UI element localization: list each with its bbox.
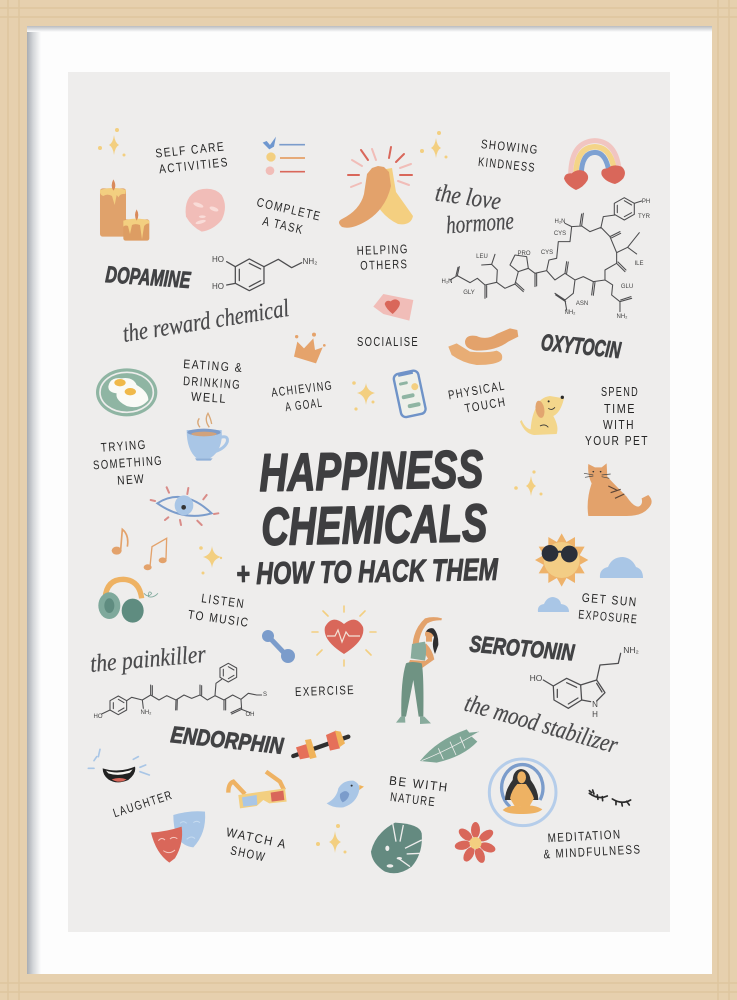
script: the love hormone: the love [434, 180, 503, 215]
label: watch a show [221, 825, 288, 868]
chart: oxytocin molecule: TYR [638, 214, 651, 220]
icon: crown [294, 333, 326, 363]
label: eating and drinking well [181, 357, 244, 407]
icon: gold sparkle right of title [514, 470, 542, 496]
chart: dopamine molecule: HO [212, 282, 224, 291]
chart: oxytocin molecule: LEU [476, 254, 488, 260]
label: showing kindness: KINDNESS [477, 155, 537, 175]
label: helping others: HELPING [357, 242, 409, 258]
label: self care activities: SELF CARE [155, 139, 226, 161]
script: the love hormone: hormone [445, 208, 515, 239]
label: trying something new [91, 437, 165, 489]
icon: monstera leaf [371, 823, 422, 873]
poster paper [68, 72, 670, 932]
label: achieving a goal: ACHIEVING [271, 378, 334, 400]
chart: endorphin molecule: HO [94, 714, 103, 720]
script: the love hormone [434, 180, 515, 239]
label: listen to music: LISTEN [200, 591, 246, 611]
label: complete a task [251, 195, 323, 240]
icon: high five [339, 147, 413, 228]
chart: serotonin molecule: H [592, 710, 598, 719]
label: meditation and mindfulness: & MINDFULNESS [543, 842, 642, 861]
icon: gold sparkle top centre [420, 131, 448, 158]
icon: small cloud [538, 597, 569, 612]
chart: serotonin molecule: N [592, 700, 598, 709]
label: physical touch [447, 379, 509, 418]
icon: blue dumbbell [262, 630, 295, 663]
chart: oxytocin molecule: PRO [517, 251, 531, 257]
chart: oxytocin molecule: PH [642, 199, 650, 205]
label: self care activities [155, 139, 229, 177]
icon: music notes [112, 529, 167, 570]
chart: endorphin molecule: S [263, 692, 267, 698]
icon: eggs on plate [96, 368, 157, 416]
label: get sun exposure [578, 590, 640, 627]
chart: oxytocin molecule: CYS [541, 250, 553, 256]
label: meditation and mindfulness: MEDITATION [547, 827, 622, 845]
label: helping others [357, 242, 410, 273]
label: self care activities: ACTIVITIES [158, 155, 229, 176]
icon: speech bubble heart [373, 294, 413, 321]
label: get sun exposure: GET SUN [581, 591, 638, 609]
chart: oxytocin molecule: CYS [554, 231, 566, 237]
label: spend time with your pet: YOUR PET [585, 434, 649, 448]
label: be with nature [386, 774, 450, 811]
chart: dopamine molecule: HO [212, 255, 224, 264]
label: exercise: EXERCISE [295, 683, 355, 699]
label: spend time with your pet: SPEND [601, 385, 639, 399]
label: showing kindness: SHOWING [480, 137, 539, 157]
label: physical touch: PHYSICAL [447, 379, 507, 402]
icon: gold sparkle top left [98, 128, 126, 156]
chart: oxytocin molecule: ILE [634, 261, 644, 267]
icon: phone [393, 370, 426, 418]
icon: rainbow with hearts [564, 141, 625, 190]
label: laughter: LAUGHTER [111, 788, 175, 820]
chart: oxytocin molecule: ASN [576, 301, 588, 307]
label: meditation and mindfulness [542, 826, 642, 861]
chart: oxytocin molecule: NH₂ [616, 314, 628, 320]
script: the reward chemical: the reward chemical [121, 295, 291, 348]
title: CHEMICALS [261, 494, 488, 557]
icon: large cloud [600, 557, 643, 578]
label: spend time with your pet [585, 385, 649, 448]
label: trying something new: SOMETHING [93, 454, 163, 472]
label: eating and drinking well: DRINKING [183, 374, 241, 392]
label: trying something new: TRYING [100, 438, 147, 455]
icon: candles [100, 179, 149, 241]
icon: eye [151, 487, 218, 525]
icon: coffee cup [187, 413, 227, 461]
label: complete a task: A TASK [261, 214, 305, 237]
label: listen to music: TO MUSIC [187, 608, 250, 630]
heading: oxytocin: OXYTOCIN [540, 329, 622, 363]
label: complete a task: COMPLETE [255, 195, 323, 224]
label: be with nature: NATURE [389, 790, 437, 809]
title: + HOW TO HACK THEM [236, 552, 499, 591]
icon: heart with rays [312, 606, 376, 666]
icon: bird [327, 781, 364, 807]
icon: face mask [186, 189, 225, 232]
heading: dopamine: DOPAMINE [105, 261, 192, 293]
chart: serotonin molecule: HO [530, 673, 543, 683]
chart: serotonin molecule: NH₂ [623, 645, 639, 655]
icon: dog [520, 396, 564, 435]
chart: oxytocin molecule: GLU [621, 284, 633, 290]
icon: meditating woman [489, 759, 556, 826]
label: achieving a goal: A GOAL [284, 396, 324, 414]
icon: laughing mouth [88, 749, 149, 782]
icon: cat [584, 463, 652, 516]
icon: sun with sunglasses [535, 533, 588, 587]
chart: oxytocin molecule: NH₂ [564, 310, 576, 316]
chart: endorphin molecule: OH [246, 712, 254, 718]
chart: oxytocin molecule: H₂N [442, 279, 452, 285]
icon: headphones [98, 579, 158, 623]
title: HAPPINESS [259, 440, 484, 503]
chart: dopamine molecule [212, 255, 317, 291]
label: socialise: SOCIALISE [357, 335, 419, 349]
label: spend time with your pet: WITH [603, 418, 635, 432]
icon: stretching woman [396, 617, 442, 724]
label: get sun exposure: EXPOSURE [578, 607, 639, 627]
icon: palm leaf [420, 729, 479, 763]
icon: checklist [263, 137, 305, 175]
title [234, 440, 499, 591]
icon: orange dumbbell [293, 731, 348, 759]
icon: red flower [454, 822, 497, 864]
icon: gold sparkle bottom [316, 824, 346, 854]
label: watch a show: WATCH A [225, 825, 288, 852]
icon: theatre masks [151, 811, 205, 863]
icon: gold sparkle achieving a goal [352, 381, 375, 411]
chart: oxytocin molecule: H₂N [554, 219, 566, 225]
heading: endorphin: ENDORPHIN [169, 721, 285, 759]
chart: oxytocin molecule [442, 198, 651, 320]
label: achieving a goal [271, 378, 336, 416]
icon: 3d glasses [228, 772, 287, 808]
chart: dopamine molecule: NH₂ [303, 257, 317, 266]
icon: hugging arms [448, 328, 518, 365]
label: eating and drinking well: EATING & [183, 357, 244, 375]
label: be with nature: BE WITH [388, 774, 450, 795]
chart: serotonin molecule [530, 645, 639, 719]
label: showing kindness [477, 137, 539, 175]
label: physical touch: TOUCH [464, 395, 507, 416]
label: helping others: OTHERS [360, 257, 409, 273]
label: eating and drinking well: WELL [191, 390, 227, 406]
label: watch a show: SHOW [229, 843, 267, 865]
chart: endorphin molecule: NH₂ [140, 710, 152, 716]
script: the painkiller: the painkiller [89, 641, 207, 678]
label: trying something new: NEW [117, 472, 146, 488]
icon: eyelashes [589, 790, 631, 806]
label: listen to music [187, 590, 253, 630]
script: the mood stabilizer: the mood stabilizer [461, 690, 621, 759]
chart: oxytocin molecule: GLY [463, 290, 475, 296]
heading: serotonin: SEROTONIN [469, 630, 576, 666]
label: spend time with your pet: TIME [604, 402, 636, 416]
chart: endorphin molecule [94, 663, 267, 720]
icon: gold sparkle near music [199, 546, 222, 574]
